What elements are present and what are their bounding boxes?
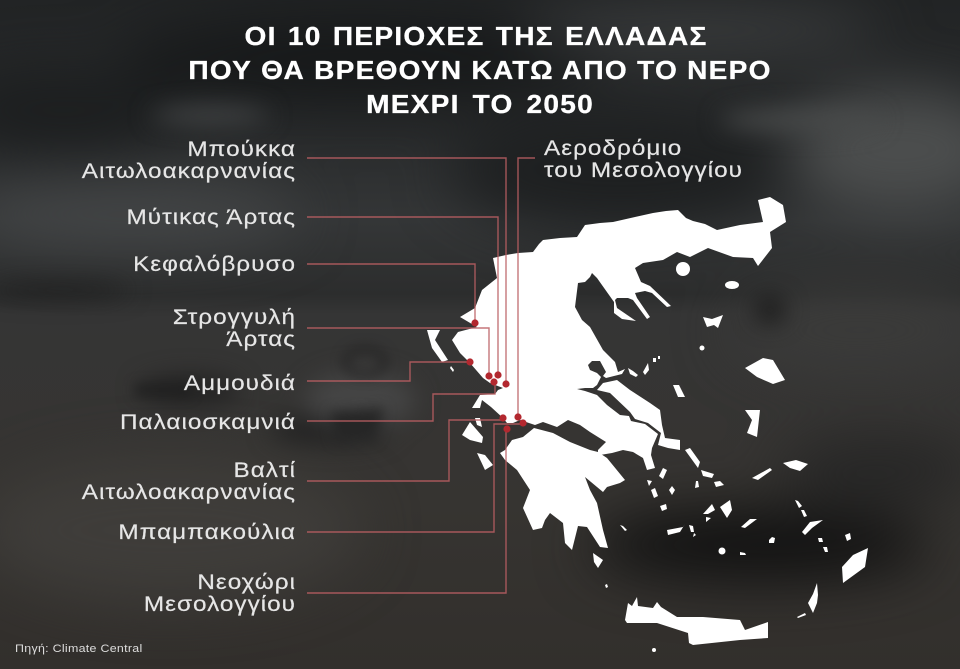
connector: Μύτικας bbox=[307, 217, 498, 375]
label: Μπούκκα Αιτωλοακαρνανίας: Αιτωλοακαρνανίας bbox=[82, 159, 296, 183]
label: Στρογγυλή Άρτας bbox=[173, 305, 296, 351]
label: Κεφαλόβρυσο: Κεφαλόβρυσο bbox=[133, 252, 296, 276]
map: Ionian islands bbox=[427, 330, 448, 362]
label: Στρογγυλή Άρτας: Στρογγυλή bbox=[173, 305, 296, 329]
connector: Νεοχώρι bbox=[307, 429, 506, 593]
label: Βαλτί Αιτωλοακαρνανίας bbox=[82, 458, 296, 504]
label: Αεροδρόμιο του Μεσολογγίου: του Μεσολογγίου bbox=[544, 158, 743, 182]
map: mainland Greece with Peloponnese bbox=[452, 197, 786, 550]
label: Μπούκκα Αιτωλοακαρνανίας: Μπούκκα bbox=[187, 137, 296, 161]
label: Αμμουδιά: Αμμουδιά bbox=[184, 371, 296, 395]
label: Μύτικας Άρτας: Μύτικας Άρτας bbox=[127, 205, 296, 229]
label: Βαλτί Αιτωλοακαρνανίας: Αιτωλοακαρνανίας bbox=[82, 480, 296, 504]
map: Crete bbox=[625, 597, 768, 645]
label: Νεοχώρι Μεσολογγίου: Νεοχώρι bbox=[197, 570, 296, 594]
label: Νεοχώρι Μεσολογγίου: Μεσολογγίου bbox=[144, 592, 296, 616]
connector: Βαλτί bbox=[307, 420, 503, 481]
map: Euboea bbox=[597, 380, 680, 450]
location markers bbox=[466, 319, 527, 433]
label: Βαλτί Αιτωλοακαρνανίας: Βαλτί bbox=[234, 458, 296, 482]
title bbox=[188, 23, 772, 119]
label: Νεοχώρι Μεσολογγίου bbox=[144, 570, 296, 616]
map: north and east Aegean islands bbox=[676, 262, 690, 276]
source note: Πηγή: Climate Central bbox=[15, 643, 143, 655]
title: ΟΙ 10 ΠΕΡΙΟΧΕΣ ΤΗΣ ΕΛΛΑΔΑΣ bbox=[244, 23, 708, 51]
connector lines bbox=[307, 158, 535, 593]
connector: Κεφαλόβρυσο bbox=[307, 264, 475, 323]
connector: Παλαιοσκαμνιά bbox=[307, 382, 495, 421]
title: ΜΕΧΡΙ ΤΟ 2050 bbox=[366, 91, 594, 119]
label: Παλαιοσκαμνιά: Παλαιοσκαμνιά bbox=[120, 410, 296, 434]
label: Μπαμπακούλια: Μπαμπακούλια bbox=[118, 520, 296, 544]
label: Μπούκκα Αιτωλοακαρνανίας bbox=[82, 137, 296, 183]
label: Αεροδρόμιο του Μεσολογγίου bbox=[544, 136, 743, 182]
label: Στρογγυλή Άρτας: Άρτας bbox=[226, 327, 296, 351]
connector: Αμμουδιά bbox=[307, 362, 470, 381]
connector: Μπούκκα bbox=[307, 158, 506, 384]
connector: Αεροδρόμιο bbox=[518, 158, 535, 417]
label: Αεροδρόμιο του Μεσολογγίου: Αεροδρόμιο bbox=[544, 136, 682, 160]
connector: Στρογγυλή bbox=[307, 328, 489, 376]
title: ΠΟΥ ΘΑ ΒΡΕΘΟΥΝ ΚΑΤΩ ΑΠΟ ΤΟ ΝΕΡΟ bbox=[188, 57, 772, 85]
map: Cyclades and Dodecanese bbox=[685, 448, 700, 468]
map: mainland and islands bbox=[427, 197, 868, 652]
connector: Μπαμπακούλια bbox=[307, 424, 523, 532]
